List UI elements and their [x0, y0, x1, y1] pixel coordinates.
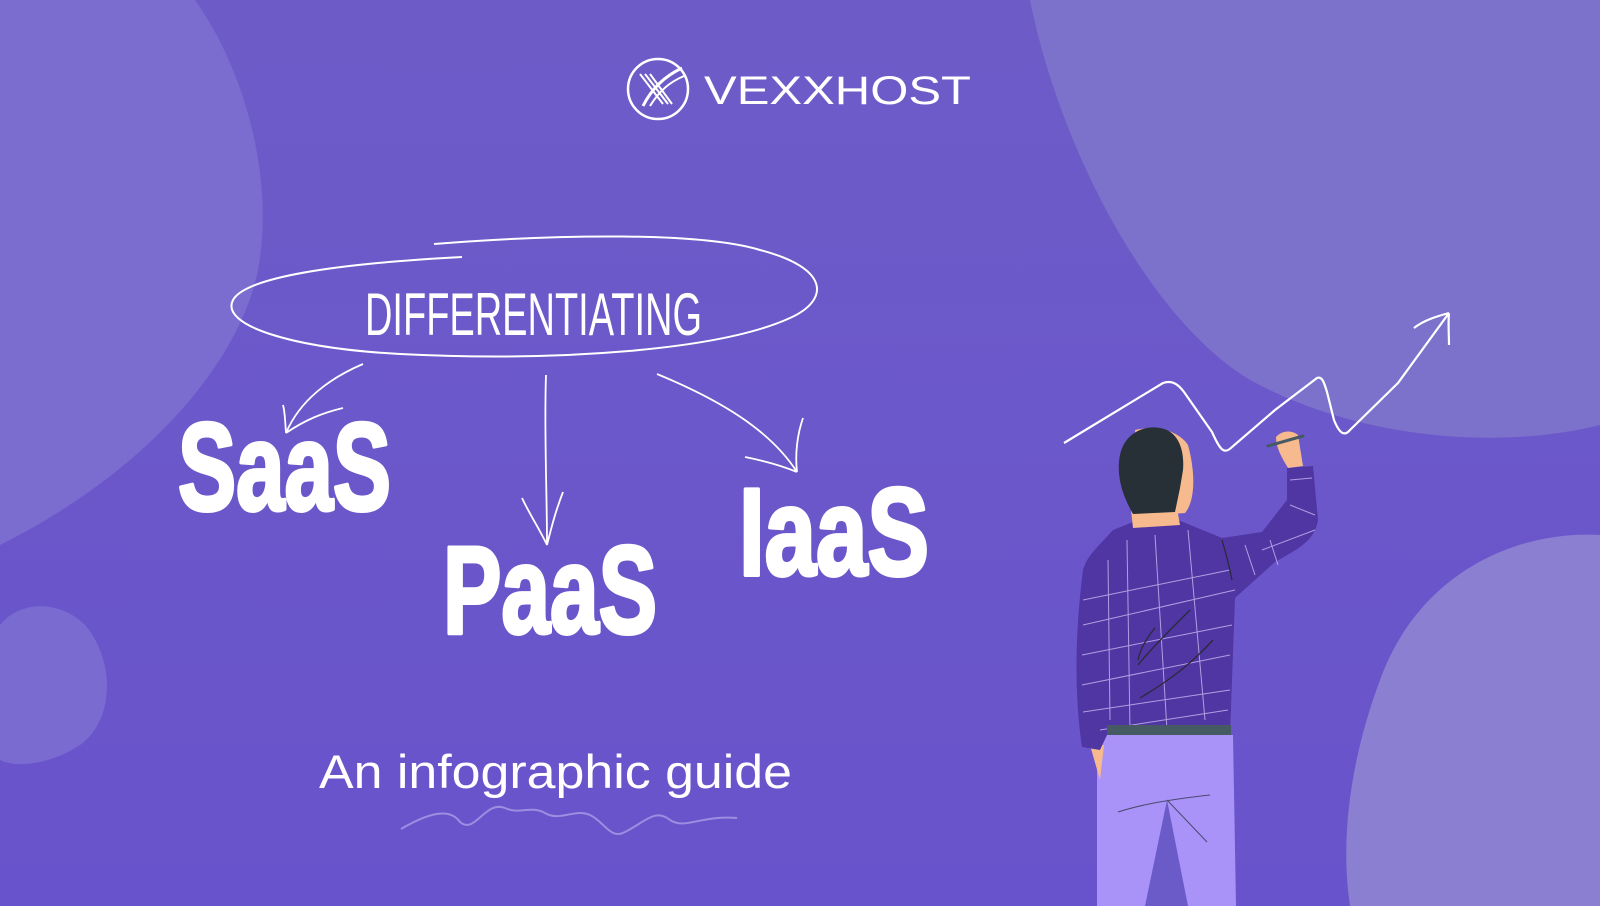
arrow: to PaaS	[522, 375, 563, 545]
neck	[1131, 508, 1180, 528]
blob: top-left	[0, 0, 263, 545]
hair	[1119, 427, 1183, 514]
blob: top-right	[1030, 0, 1600, 438]
chart line with arrow	[1064, 313, 1449, 451]
heading: ellipse scribble with DIFFERENTIATING: DIFFERENTIATING	[365, 281, 702, 348]
head	[1135, 428, 1193, 515]
belt	[1107, 725, 1231, 735]
shirt plaid lines	[1082, 478, 1315, 730]
blob: bottom-left	[0, 606, 107, 764]
pants	[1097, 735, 1236, 906]
subtitle: An infographic guide	[319, 745, 792, 798]
arrow: to SaaS	[283, 364, 363, 433]
blob: bottom-right	[1346, 535, 1600, 906]
icon: logo circle	[628, 59, 688, 119]
raised hand and pen	[1276, 431, 1303, 468]
heading: ellipse scribble with DIFFERENTIATING	[231, 236, 817, 356]
label: SaaS: SaaS	[178, 399, 391, 537]
shirt with raised sleeve	[1076, 466, 1318, 750]
illustration: man drawing on wall	[1076, 427, 1318, 906]
squiggle under subtitle	[401, 807, 737, 834]
label: PaaS: PaaS	[443, 522, 657, 660]
hand in pocket	[1090, 745, 1104, 780]
logo	[628, 59, 971, 119]
arrow: to IaaS	[657, 374, 803, 472]
label: IaaS: IaaS	[739, 464, 929, 602]
logo text: VEXXHOST	[704, 69, 971, 113]
